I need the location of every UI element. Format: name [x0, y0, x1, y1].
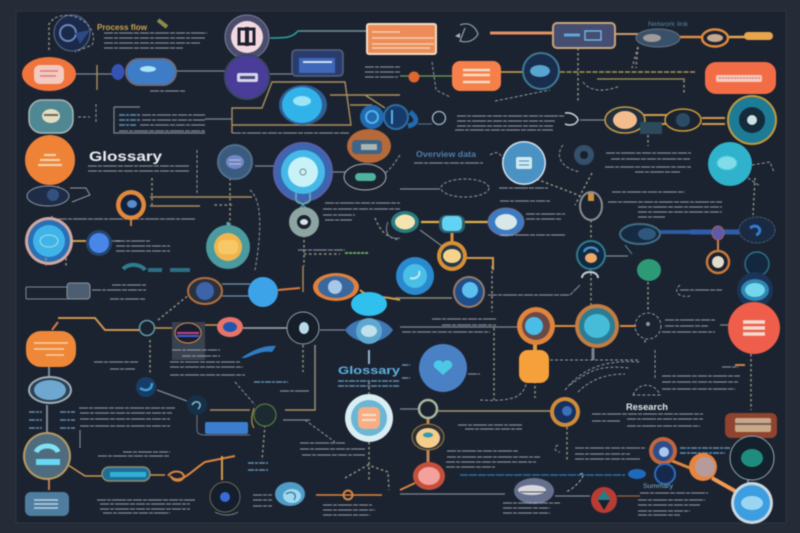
node: orange hexagon centre	[519, 350, 549, 383]
node: dark striped tank	[172, 322, 220, 360]
node: gold bar	[744, 32, 773, 40]
text block: top-left	[104, 33, 207, 48]
card: top rectangle	[553, 23, 615, 48]
heading: blue banner	[338, 365, 401, 386]
icon: blue swoosh	[241, 346, 276, 358]
text block: boxed list	[78, 104, 232, 133]
node: cyan right	[708, 142, 774, 186]
text block: bottom left	[97, 463, 272, 513]
node: dark teal ring	[730, 436, 774, 480]
card: brown	[725, 413, 777, 438]
node: dark blue small	[745, 252, 769, 276]
node: red circle	[728, 302, 780, 354]
node: blue circle	[248, 277, 278, 307]
heading: blue banner: Glossary	[338, 365, 401, 377]
heading: main title: Glossary	[89, 148, 162, 164]
card: blue rectangle	[292, 50, 343, 76]
node: blue pill	[112, 59, 176, 85]
heading: bottom right: Research	[626, 402, 668, 412]
node: brown-orange oval	[347, 129, 391, 163]
node: blue swirl small	[136, 377, 156, 397]
text block: centre	[323, 203, 400, 240]
node: dark blue with orange	[577, 241, 605, 269]
heading: blurred blue: Overview data	[416, 150, 477, 159]
node: dark pale	[287, 312, 319, 344]
node: outlined oval with teal pill	[344, 164, 386, 190]
node: orange blob	[22, 57, 76, 91]
node: grey-green ring	[419, 400, 437, 418]
text block: centre bottom	[555, 445, 645, 459]
node: bright blue circle	[279, 85, 327, 125]
text block: row three	[455, 113, 578, 130]
node: orange ring	[116, 190, 146, 220]
text block: lower left	[79, 408, 175, 456]
icon: top-right arc	[455, 24, 478, 42]
node: dark cyan right	[737, 272, 773, 308]
text block: bottom right	[592, 414, 703, 426]
node: blue twin	[25, 217, 112, 265]
text block: final row	[638, 484, 708, 515]
node: red ring	[413, 462, 445, 490]
node: red teal	[591, 487, 617, 513]
node: teal hook	[289, 193, 319, 237]
node: orange cream ring	[437, 241, 467, 271]
node: swirl ring	[453, 276, 485, 308]
text block: right small	[662, 365, 745, 389]
node: dark oval	[27, 186, 90, 206]
node: gold dark ring	[640, 109, 701, 134]
node: orange ring cyan	[517, 307, 555, 345]
node: blue pill lower	[205, 422, 248, 434]
text block: beside dashed	[662, 320, 715, 332]
node: slate gold	[23, 432, 71, 480]
card: orange top	[367, 24, 436, 54]
node: blue small pair	[628, 464, 675, 484]
heading: top-left	[97, 20, 167, 32]
connector network	[47, 31, 755, 496]
icon: blue swirl cloud	[275, 482, 305, 506]
node: light blue ring	[488, 208, 524, 236]
text block: below blue circle	[400, 179, 551, 201]
node: top right oval	[636, 29, 680, 68]
node: grey dome	[514, 478, 554, 504]
node: blue upper right cluster	[396, 257, 434, 295]
node: pinkish orange	[689, 453, 717, 481]
text block: upper middle	[150, 67, 400, 91]
node: teal rounded	[29, 100, 73, 133]
node: purple circle	[225, 55, 269, 99]
text block: lower centre right	[323, 505, 375, 515]
icon: ghost dome	[633, 385, 660, 395]
label: small blue caption: Network link	[648, 22, 689, 28]
node: orange ring blue	[313, 273, 359, 301]
node: pink circle	[225, 15, 269, 59]
icon: orange swirl	[168, 472, 184, 481]
node: peach ring	[605, 107, 645, 133]
node: peach centre	[345, 394, 393, 442]
node: orange small ring	[707, 251, 729, 273]
icon: orange swirl lower	[344, 490, 352, 500]
node: teal gold circle	[206, 225, 250, 269]
text block: small left columns	[29, 412, 75, 428]
node: small teal open	[140, 320, 154, 336]
node: orange-ring navy	[188, 278, 222, 304]
text block: right centre	[605, 135, 692, 172]
node: blue ringed left	[29, 377, 71, 403]
text block: under ring	[500, 214, 565, 235]
text block: mid left	[170, 362, 245, 375]
node: blue circle right	[502, 141, 546, 185]
node: orange ring navy	[550, 397, 580, 427]
node: orange link ring	[702, 30, 728, 46]
text block: under main title	[88, 166, 190, 171]
node: cyan rounded	[439, 215, 465, 233]
icon: blue cluster	[360, 105, 446, 129]
text block: lower centre small	[503, 503, 560, 513]
heading: cyan vertical	[402, 365, 410, 378]
text block: mid bottom	[446, 425, 540, 467]
icon: dark dot	[559, 145, 594, 172]
node: bottom-right blue	[731, 482, 773, 524]
node: orange-navy small	[649, 437, 730, 465]
node: blue heart	[419, 344, 480, 392]
node: orange rounded blob	[26, 331, 76, 367]
node: orange top-row circle dot	[408, 72, 420, 82]
node: big teal target	[727, 95, 777, 145]
node: hanging oval	[580, 192, 602, 220]
node: green dark ring	[252, 404, 276, 428]
node: orange circle	[25, 135, 75, 185]
node: teal orange	[575, 304, 619, 348]
node: blue large	[345, 318, 393, 344]
label: green note	[298, 250, 368, 253]
node: small dark blue	[210, 482, 240, 515]
card: coral	[705, 62, 776, 94]
node: large central circle	[274, 143, 332, 201]
node: dashed dark	[635, 313, 661, 339]
node: cyan ellipse	[351, 292, 387, 316]
node: slate circle	[218, 145, 252, 179]
icon: top-left swirl	[49, 15, 94, 52]
text block: mid right centre	[402, 319, 496, 332]
node: cream ring	[412, 424, 444, 450]
node: swirl right	[739, 217, 775, 243]
node: teal cream row	[386, 211, 419, 238]
node: coral ring	[217, 317, 243, 337]
heading: top-left: Process flow	[97, 23, 148, 32]
text block: left mid	[46, 241, 170, 266]
node: blue-grey card	[25, 492, 69, 516]
heading: blurred blue	[414, 150, 483, 163]
text block: blue blobs	[123, 265, 190, 270]
node: dark blue right oval	[620, 224, 660, 244]
text block: far-left box	[26, 283, 146, 299]
card: orange with lines	[452, 61, 501, 91]
node: swirl	[187, 395, 207, 415]
label: white hook note	[677, 285, 722, 296]
node: green ellipse	[637, 259, 661, 281]
node: purple connector bead	[712, 226, 724, 240]
node: dark blue ring	[523, 53, 559, 89]
text block: caption mid	[94, 362, 310, 391]
node: pill teal	[102, 467, 150, 481]
text block: final row: Summary	[643, 484, 673, 490]
text block: lower centre	[283, 420, 365, 455]
text block: right middle	[608, 192, 722, 217]
